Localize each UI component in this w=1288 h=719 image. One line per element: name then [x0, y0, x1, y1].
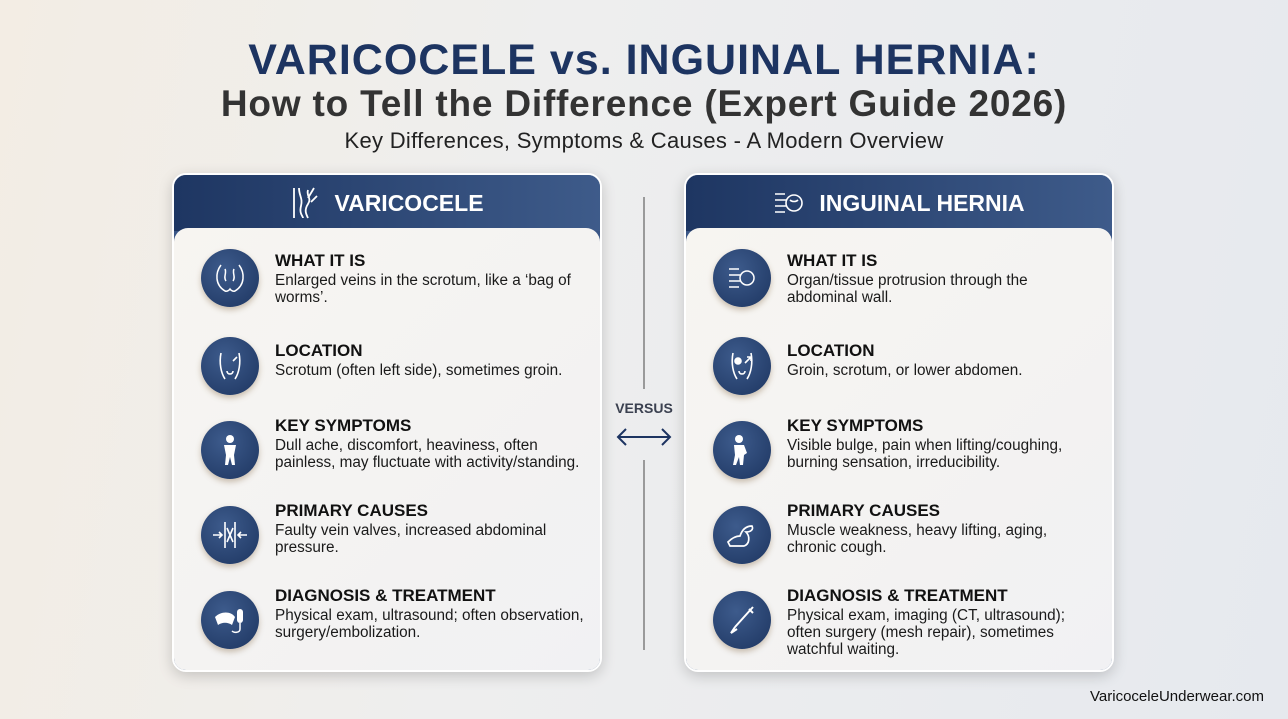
- row: key symptoms: Dull ache, discomfort, heaviness, often painless, may fluctuate with activity/standing.: [275, 437, 579, 471]
- row: what it is: WHAT IT IS: [787, 251, 877, 270]
- row: what it is: Enlarged veins in the scrotum, like a ‘bag of worms’.: [275, 272, 571, 306]
- row: primary causes: Muscle weakness, heavy lifting, aging, chronic cough.: [787, 522, 1047, 556]
- arrow: double: [616, 428, 672, 446]
- row: what it is: Organ/tissue protrusion through the abdominal wall.: [787, 272, 1028, 306]
- row: location: LOCATION: [275, 341, 363, 360]
- row: location: Groin, scrotum, or lower abdomen.: [787, 362, 1022, 379]
- title line 1: VARICOCELE vs. INGUINAL HERNIA:: [248, 36, 1040, 84]
- header: inguinal hernia: [686, 175, 1112, 231]
- row: diagnosis: [710, 586, 1065, 658]
- row: primary causes: PRIMARY CAUSES: [787, 501, 940, 520]
- row: location: Scrotum (often left side), sometimes groin.: [275, 362, 562, 379]
- row: location: LOCATION: [787, 341, 875, 360]
- header: varicocele: VARICOCELE: [334, 190, 484, 216]
- row: location: [198, 336, 562, 402]
- row: diagnosis: DIAGNOSIS & TREATMENT: [275, 586, 496, 605]
- panel: inguinal hernia: [684, 173, 1114, 672]
- row: key symptoms: [198, 416, 579, 486]
- divider line bottom: [643, 460, 645, 650]
- header: inguinal hernia: INGUINAL HERNIA: [819, 190, 1025, 216]
- row: diagnosis: Physical exam, imaging (CT, ultrasound); often surgery (mesh repair), sometimes watchful waiting.: [787, 607, 1065, 658]
- row: primary causes: [198, 501, 546, 570]
- row: what it is: [710, 248, 1028, 314]
- row: what it is: WHAT IT IS: [275, 251, 365, 270]
- row: diagnosis: DIAGNOSIS & TREATMENT: [787, 586, 1008, 605]
- footer: website: VaricoceleUnderwear.com: [1090, 688, 1264, 705]
- row: diagnosis: Physical exam, ultrasound; often observation, surgery/embolization.: [275, 607, 584, 641]
- row: location: [710, 336, 1022, 402]
- subtitle: Key Differences, Symptoms & Causes - A Modern Overview: [344, 128, 944, 153]
- row: key symptoms: KEY SYMPTOMS: [275, 416, 411, 435]
- versus label: VERSUS: [615, 400, 673, 416]
- row: what it is: [198, 248, 571, 314]
- row: key symptoms: [710, 416, 1062, 486]
- divider line top: [643, 197, 645, 389]
- row: key symptoms: Visible bulge, pain when lifting/coughing, burning sensation, irreducibility.: [787, 437, 1062, 471]
- panel: varicocele: [172, 173, 602, 672]
- row: primary causes: [710, 501, 1047, 570]
- title line 2: How to Tell the Difference (Expert Guide 2026): [221, 83, 1067, 124]
- row: primary causes: Faulty vein valves, increased abdominal pressure.: [275, 522, 546, 556]
- header: varicocele: [174, 175, 600, 231]
- row: diagnosis: [198, 586, 584, 656]
- row: key symptoms: KEY SYMPTOMS: [787, 416, 923, 435]
- row: primary causes: PRIMARY CAUSES: [275, 501, 428, 520]
